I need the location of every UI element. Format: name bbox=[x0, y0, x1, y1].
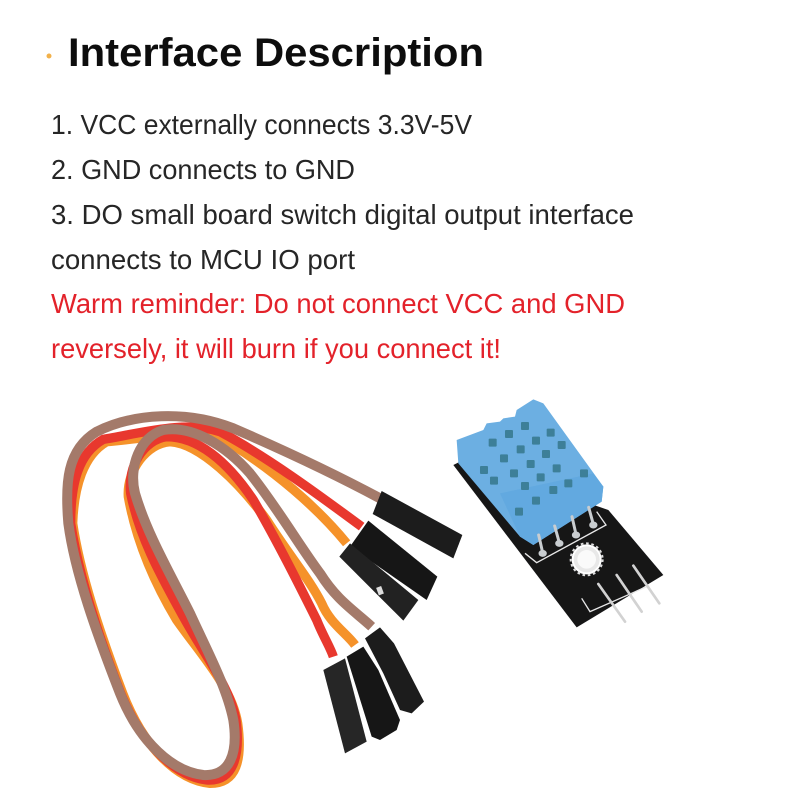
sensor solder pins bbox=[539, 507, 596, 555]
connector: lower red bbox=[323, 658, 367, 753]
warning text: reversely, it will burn if you connect it! bbox=[51, 333, 501, 364]
jumper connectors bbox=[323, 491, 462, 753]
connector: lower orange bbox=[347, 647, 400, 740]
mounting hole bbox=[573, 545, 601, 573]
warning text: Warm reminder: Do not connect VCC and GND bbox=[51, 288, 625, 319]
title: Interface Description bbox=[68, 31, 484, 75]
board silkscreen outlines bbox=[525, 512, 647, 612]
warning text bbox=[51, 288, 625, 364]
connector: orange bbox=[339, 543, 418, 621]
connector: top brown bbox=[373, 491, 462, 558]
blue sensor housing bbox=[457, 399, 603, 545]
sensor front face shading bbox=[500, 473, 603, 545]
text block: interface instructions: 2. GND connects to GND bbox=[51, 154, 355, 185]
text block: interface instructions: 3. DO small board switch digital output interface bbox=[51, 199, 634, 230]
jumper cable ribbon bbox=[67, 416, 380, 783]
icon: orange bullet dot bbox=[46, 54, 52, 58]
sensor vent holes bbox=[480, 422, 588, 516]
sensor module bbox=[453, 399, 663, 627]
orange wire bbox=[73, 435, 355, 783]
output header pins bbox=[598, 566, 659, 622]
circuit board bbox=[453, 460, 663, 627]
connector: red bbox=[350, 521, 437, 600]
text block: interface instructions bbox=[51, 109, 634, 275]
latch highlight bbox=[376, 586, 384, 595]
text block: interface instructions: 1. VCC externally connects 3.3V-5V bbox=[51, 109, 472, 140]
text block: interface instructions: connects to MCU IO port bbox=[51, 244, 355, 275]
red wire bbox=[71, 427, 362, 780]
connector: lower brown bbox=[365, 627, 424, 713]
brown wire bbox=[67, 416, 380, 775]
